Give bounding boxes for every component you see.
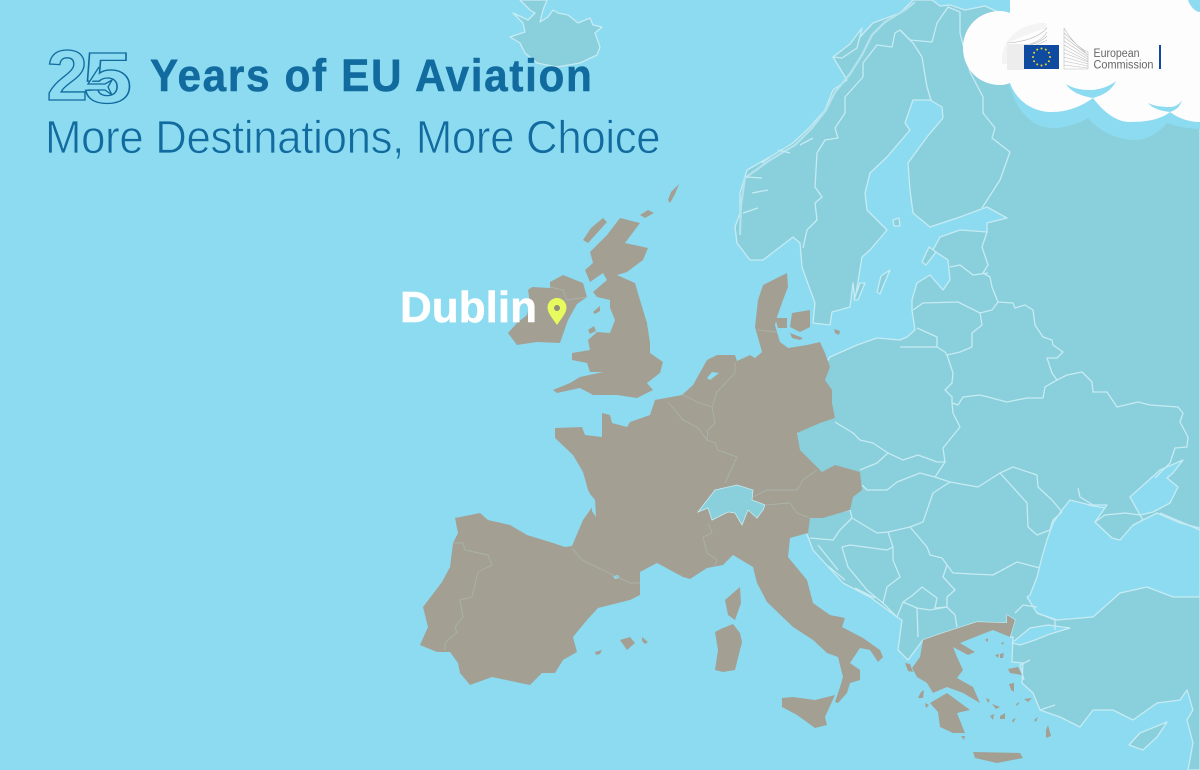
sea: Sea of Marmara: [1012, 625, 1070, 645]
Norwegian fjord coast fringe: [740, 2, 915, 235]
badge: 25 years with plane: 2: [46, 37, 88, 116]
logo text: Commission: [1094, 60, 1154, 72]
islands: Danish Funen, Zealand, Lolland, Bornholm: [775, 310, 840, 340]
island: Cyprus: [1129, 722, 1167, 750]
island: Sicily: [782, 695, 835, 728]
country: Switzerland: [698, 485, 765, 525]
land: Peloponnese: [930, 693, 970, 733]
faint internal borders in the highlighted area: [445, 287, 817, 650]
island: Sardinia: [715, 624, 742, 672]
islands: Balearics: [595, 637, 648, 655]
cloud crescents: [1066, 81, 1182, 112]
country borders: [743, 7, 1200, 710]
island: Crete: [973, 752, 1023, 763]
land: Iceland: [510, 0, 602, 67]
label: Dublin: Dublin: [400, 283, 537, 332]
cloud body: [963, 0, 1200, 122]
sea notches in highlighted land: [591, 372, 719, 579]
islands: Aegean: [905, 638, 1051, 740]
land: Great Britain: [553, 218, 663, 398]
cloud banner: [963, 0, 1200, 140]
logo building left: [1007, 28, 1047, 69]
land: France, Iberia, Benelux, Germany, Denmark, Austria, Italy: [420, 273, 883, 703]
logo text: European: [1094, 48, 1140, 60]
islands: Hebrides, Orkney, Shetland, Man, Anglesey: [583, 184, 679, 334]
land: Scandinavia and eastern Europe: [735, 0, 1200, 770]
land: Greece mainland: [912, 615, 1015, 703]
badge: 25 years with plane: [46, 37, 132, 119]
logo: EU flag: [1024, 45, 1059, 69]
subtitle: More Destinations, More Choice: [45, 111, 661, 163]
sea: Sea of Azov: [1130, 460, 1183, 515]
map: non-highlighted countries: [510, 0, 1200, 770]
cloud shadow: [1000, 60, 1200, 140]
logo text: [1094, 48, 1154, 72]
logo building right: [1064, 28, 1088, 69]
island: Corsica: [725, 587, 741, 620]
logo: European Commission: [1002, 23, 1161, 72]
title: Years of EU Aviation: [150, 51, 592, 101]
land: Crimea: [1095, 513, 1143, 540]
badge: 25 years with plane: 5: [83, 38, 132, 119]
logo bar: [1159, 45, 1161, 69]
logo building disc: [1002, 23, 1047, 64]
icon: location pin: [548, 298, 566, 325]
map: highlighted countries (Western Europe and Greece): [420, 184, 1051, 763]
islands: Baltic Gotland, Oland, Aland, Saaremaa: [833, 28, 936, 300]
sea: Black Sea: [1027, 500, 1200, 620]
land: Ireland: [508, 275, 587, 345]
